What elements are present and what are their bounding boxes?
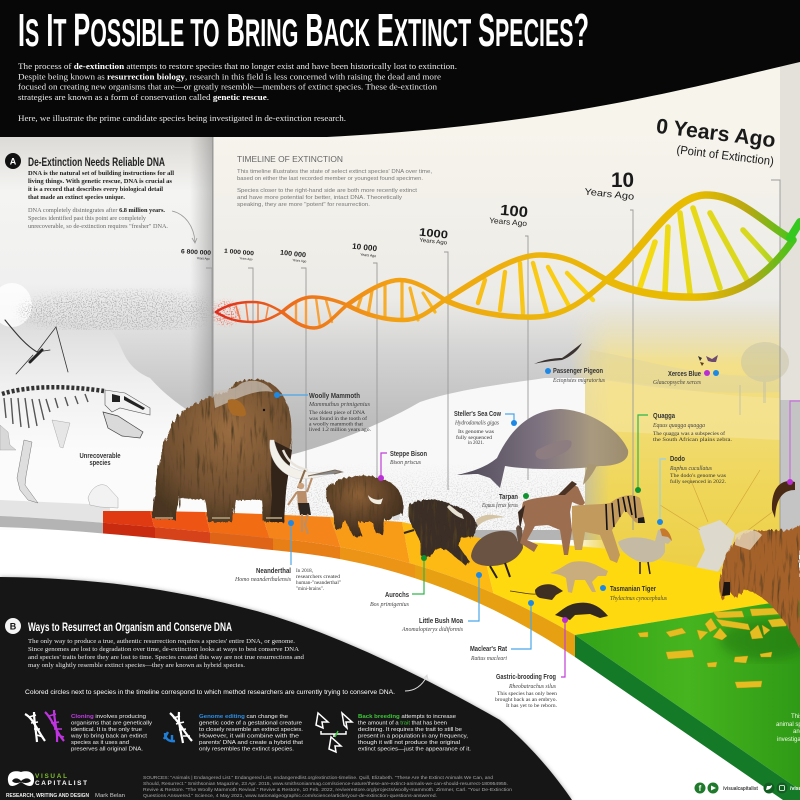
label: 100: 100 (499, 202, 529, 221)
label: 10: Years Ago (584, 186, 635, 202)
label: 10: 10 (611, 169, 634, 192)
animal: aurochs (404, 499, 505, 565)
paragraph A: living things. With genetic rescue, DNA is crucial as (28, 178, 172, 185)
label: 100 000: Years Ago (292, 258, 307, 263)
unrecoverable label: species (90, 460, 111, 467)
badge A (5, 153, 21, 169)
label: 0 Years Ago (653, 115, 778, 168)
intro paragraph: Despite being known as resurrection biology , research in this field is less concerned with raising the dead and more (18, 72, 441, 82)
animal: steppe bison (327, 476, 403, 537)
animal: tarpan (518, 481, 585, 555)
text: genome editing: However, it will combine with the (199, 734, 299, 740)
callout: woolly mammoth: a woolly mammoth that (309, 422, 364, 428)
gold fragments (638, 608, 787, 688)
animal: quagga (572, 495, 645, 563)
callout: aurochs: Bos primigenius (370, 602, 410, 608)
animal: gastric-brooding frog (555, 603, 608, 620)
callout: quagga: the South African plains zebra. (653, 438, 732, 443)
callout: xerces blue: Glaucopsyche xerces (653, 380, 702, 386)
paragraph B: may only slightly resemble extinct species—they are known as hybrid species. (28, 662, 245, 669)
callout: dodo (657, 456, 726, 525)
animal: large hybrid beast (720, 481, 800, 650)
text: back breeding: Back breeding attempts to increase (358, 714, 456, 720)
unrecoverable label (80, 453, 121, 467)
arrow: to timeline (405, 675, 428, 691)
animal: neanderthal (288, 470, 342, 534)
callout: steppe bison (378, 451, 427, 481)
text: back breeding: present in a population in any frequency, (358, 734, 468, 740)
timeline paragraph: Species closer to the right-hand side are both more recently extinct (237, 188, 418, 194)
callout: passenger pigeon: Passenger Pigeon (553, 368, 603, 375)
text: back breeding: declining. It requires the trait to still be (358, 727, 462, 733)
callout: steller's sea cow: Its genome was (458, 430, 494, 435)
callout: maclear's rat: Maclear's Rat (470, 646, 508, 653)
intro paragraph: Here, we illustrate the prime candidate species being investigated in de-extinction research. (18, 114, 346, 123)
DNA strands (216, 195, 800, 328)
animal: passenger pigeon (534, 343, 582, 364)
label: 6 800 000 (181, 248, 212, 261)
text: genome editing (199, 714, 303, 752)
timeline paragraph: speaking, they are more "potent" for resurrection. (237, 202, 370, 208)
credit name: Mark Belan (95, 793, 125, 799)
callout: quagga: The quagga was a subspecies of (653, 432, 725, 437)
animal: dodo (618, 528, 672, 574)
text: cloning: organisms that are genetically (71, 720, 152, 726)
text: genome editing: genetic code of a gestational creature (199, 720, 302, 726)
text: cloning: preserves all original DNA. (71, 746, 143, 752)
section A: De-Extinction Needs Reliable DNA (5, 153, 197, 243)
DNA dust left of the helix (0, 280, 242, 330)
heading A: De-Extinction Needs Reliable DNA (28, 155, 165, 169)
visual capitalist logo: VISUAL (35, 773, 67, 780)
text: cloning: identical. It is the only true (71, 727, 142, 733)
callout: steller's sea cow: in 2021. (468, 441, 484, 446)
bottom dark panel (0, 577, 572, 800)
label: 1 000 000: 1 000 000 (224, 248, 255, 257)
callout: gastric-brooding frog: Gastric-brooding Frog (496, 674, 556, 681)
label: 1000 (418, 227, 449, 247)
intro paragraph: The process of de-extinction attempts to restore species that no longer exist and have been historically lost to extinction. (18, 62, 457, 71)
callout: tarpan: Tarpan (499, 494, 518, 501)
paragraph B (28, 638, 305, 669)
sources: SOURCES: "Animals | Endangered List." Endangered List, endangeredlist.org/extinction-timeline. Quill, Elizabeth. "These Are the Extinct Animals We Can, and (143, 775, 493, 780)
text: genome editing: Genome editing can change the (199, 714, 288, 720)
callout: dodo: The dodo's genome was (670, 474, 726, 479)
DNA double helix (216, 195, 800, 328)
label: 0 Years Ago: (Point of Extinction) (676, 142, 775, 168)
intro paragraph (18, 62, 457, 123)
social icons (694, 782, 800, 794)
paragraph A2 (28, 207, 169, 230)
paragraph A2: DNA completely disintegrates after 6.8 million years. (28, 207, 166, 214)
timeline paragraph (237, 169, 432, 208)
triceratops skull (88, 485, 118, 508)
text: cloning: way to bring back an extinct (70, 734, 147, 740)
paragraph B: Since genomes are lost to degradation over time, de-extinction looks at ways to best conserve DNA (28, 646, 299, 653)
label: 6 800 000: Years Ago (197, 256, 210, 261)
yellow wall zone (570, 300, 780, 620)
unrecoverable species fossils (0, 320, 150, 508)
intro paragraph: strategies are known as a form of conservation called genetic rescue . (18, 93, 269, 102)
callout: passenger pigeon: Ectopistes migratorius (552, 378, 606, 384)
callout: woolly mammoth (274, 392, 371, 433)
callout: woolly mammoth: Mammuthus primigenius (308, 402, 371, 408)
text: genome editing: to closely resemble an extinct species. (199, 727, 303, 733)
paragraph A: DNA is the natural set of building instructions for all (28, 170, 174, 177)
crack splash (660, 470, 775, 600)
label: 10 000: 10 000 (352, 242, 378, 253)
callout: steppe bison: Steppe Bison (390, 451, 427, 458)
paragraph A: that made an extinct species unique. (28, 194, 125, 201)
label: 6 800 000: 6 800 000 (181, 248, 212, 257)
callout: right-edge species leader (787, 401, 800, 485)
animal: maclear's rat (510, 584, 563, 600)
animal: little bush moa (471, 525, 523, 578)
callout: gastric-brooding frog: This species has only been (497, 692, 558, 697)
callout: gastric-brooding frog: brought back as an embryo. (495, 698, 557, 703)
animal: steller's sea cow (457, 409, 628, 488)
t-rex skeleton (0, 387, 150, 503)
green ground (575, 596, 800, 790)
ground front faces (0, 516, 575, 657)
title: IS IT POSSIBLE TO BRING BACK EXTINCT SPECIES? (18, 4, 589, 56)
badge B (5, 618, 21, 634)
callout: gastric-brooding frog: It has yet to be reborn. (506, 704, 557, 709)
badge B: B (10, 622, 17, 632)
callout: aurochs: Aurochs (385, 592, 409, 599)
callout: maclear's rat (470, 600, 534, 662)
callout: tarpan (481, 493, 529, 509)
callout: tarpan: Equus ferus ferus (481, 502, 519, 509)
callout: neanderthal: Neanderthal (256, 568, 291, 575)
callout: dodo: fully sequenced in 2022. (670, 480, 726, 485)
paragraph B: and species' traits before they are lost to time. Species created this way are not true resurrections and (28, 654, 305, 661)
cropped green caption: investiga (777, 737, 800, 743)
timeline paragraph: based on either the last recorded member or youngest found specimen. (237, 176, 423, 182)
label: 10 000: Years Ago (360, 253, 376, 258)
callout: aurochs (370, 555, 427, 608)
callout: tasmanian tiger (600, 585, 668, 602)
callout: neanderthal: "mini-brains". (296, 587, 324, 592)
timeline of extinction text (237, 154, 432, 208)
animal: woolly mammoth (152, 379, 341, 522)
species callouts (234, 368, 800, 743)
timeline year labels (181, 115, 778, 263)
timeline paragraph: This timeline illustrates the state of select extinct species' DNA over time, (237, 169, 432, 175)
note: colored circles: Colored circles next to species in the timeline correspond to which method researchers are currently trying to conserve DNA. (25, 689, 395, 696)
timeline paragraph: and have more potential for better, intact DNA. Theoretically (237, 195, 402, 201)
callout: steller's sea cow: Steller's Sea Cow (454, 411, 501, 418)
callout: neanderthal: In 2018, (296, 569, 313, 574)
social icons: /visualcapitalist (723, 786, 758, 792)
DNA rungs (236, 208, 773, 327)
sources: Questions Answered." Science, 4 May 2021, www.nationalgeographic.com/science/article/your-de-extinction-questions-answered. (143, 793, 437, 798)
icon: cloning DNA (25, 710, 64, 742)
paragraph A2: Species identified past this point are completely (28, 215, 146, 222)
callout: steller's sea cow: Hydrodamalis gigas (454, 420, 500, 426)
callout: dodo: Dodo (670, 456, 685, 463)
callout: woolly mammoth: was found in the tooth of (309, 417, 367, 422)
callout: gastric-brooding frog (495, 617, 568, 709)
label: 1000: Years Ago (419, 238, 447, 247)
callout: little bush moa (401, 572, 482, 633)
label: 1000: 1000 (418, 227, 449, 242)
callout: passenger pigeon (545, 368, 606, 384)
intro paragraph: focused on creating new organisms that are—or greatly resemble—members of extinct species. These de-extinction (18, 82, 438, 92)
label: 1 000 000 (223, 248, 255, 261)
text: genome editing: parents' DNA and create a hybrid that (199, 740, 303, 746)
icon: back breeding (316, 713, 352, 752)
footer (6, 771, 800, 799)
callout: woolly mammoth: Woolly Mammoth (309, 393, 360, 400)
label: 100: Years Ago (489, 216, 528, 228)
callout: neanderthal: researchers created (296, 575, 341, 580)
social icons: f (699, 784, 702, 793)
text: cloning: Cloning involves producing (71, 714, 146, 720)
visual capitalist logo: CAPITALIST (35, 780, 87, 787)
label: 10 000 (351, 242, 378, 258)
arrow: to 6 800 000 (172, 211, 197, 243)
animal: xerces blue butterflies (698, 355, 718, 366)
label: 10 (584, 169, 635, 202)
cropped green caption (776, 714, 800, 743)
sources: Revive & Restore. "The Woolly Mammoth Revival." Revive & Restore, 10 Feb. 2022, reviverestore.org/projects/woolly-mammoth. Zimmer, Carl. "Your De-Extinction (143, 787, 512, 792)
sources (143, 775, 512, 798)
heading B: Ways to Resurrect an Organism and Conserve DNA (28, 620, 232, 634)
callout: quagga: Quagga (653, 413, 675, 420)
callout: little bush moa: Little Bush Moa (419, 618, 463, 625)
callout: little bush moa: Anomalopteryx didiformis (401, 626, 464, 633)
species animals (152, 343, 800, 650)
label: 100 000: 100 000 (280, 250, 306, 259)
callout: maclear's rat: Rattus macleari (470, 656, 507, 662)
unrecoverable label: Unrecoverable (80, 453, 121, 460)
callout: steppe bison: Bison priscus (390, 460, 422, 466)
callout: steller's sea cow: fully sequenced (456, 436, 493, 441)
heading: timeline: TIMELINE OF EXTINCTION (237, 154, 343, 164)
section B: ways to resurrect (5, 618, 471, 752)
timeline marker lines (206, 180, 780, 535)
text: cloning (70, 714, 152, 752)
paragraph A (28, 170, 174, 201)
platform ground (0, 500, 800, 800)
callout: woolly mammoth: lived 1.2 million years ago. (309, 428, 371, 433)
callout: quagga (635, 413, 732, 493)
text: back breeding: though it will not produce the original (358, 740, 460, 746)
paragraph A: it is a record that describes every biological detail (28, 186, 163, 193)
callout: steller's sea cow (454, 411, 517, 446)
distant trees (739, 342, 789, 415)
label: 100 000 (279, 250, 307, 263)
pterosaur skeleton (5, 320, 68, 374)
label: 0 Years Ago: 0 Years Ago (655, 115, 777, 152)
ground top surface (0, 500, 790, 640)
credits: RESEARCH, WRITING AND DESIGN (6, 793, 89, 799)
visual capitalist logo (8, 771, 87, 787)
top black header (0, 0, 800, 137)
badge A: A (10, 156, 17, 166)
text: genome editing: only resembles the extinct species. (199, 746, 294, 752)
animal: tasmanian tiger (550, 561, 608, 593)
callout: tasmanian tiger: Thylacinus cynocephalus (610, 596, 668, 602)
label: 1 000 000: Years Ago (239, 256, 253, 261)
callout: xerces blue (653, 370, 719, 386)
callout: neanderthal: Homo neanderthalensis (234, 577, 292, 583)
snowy hills backdrop (0, 340, 789, 572)
text: cloning: species as it uses and (71, 740, 129, 746)
sources: Should, Resurrect." Smithsonian Magazine, 23 Apr. 2015, www.smithsonianmag.com/science-nature/these-are-extinct-animals-we-can-should-resurrect-180954955. (143, 781, 508, 786)
callout: neanderthal: human-"neanderthal" (296, 581, 341, 586)
callout: xerces blue: Xerces Blue (668, 371, 701, 378)
text: back breeding: extinct species—just the appearance of it. (358, 746, 471, 752)
callout: gastric-brooding frog: Rheobatrachus silus (508, 684, 557, 690)
wall background (0, 50, 800, 620)
callout: neanderthal (234, 520, 341, 592)
text: back breeding (358, 714, 471, 752)
callout: woolly mammoth: The oldest piece of DNA (309, 411, 365, 416)
paragraph A2: unrecoverable, so de-extinction requires "fresher" DNA. (28, 223, 169, 230)
label: 100 (489, 201, 529, 228)
callout: quagga: Equus quagga quagga (652, 423, 705, 429)
callout: dodo: Raphus cucullatus (669, 466, 713, 472)
text: back breeding: the amount of a trait that has been (358, 720, 447, 726)
callout: tasmanian tiger: Tasmanian Tiger (610, 586, 656, 593)
paragraph B: The only way to produce a true, authentic resurrection requires a species' entire DNA, or genome. (28, 638, 295, 645)
icon: genome editing DNA (164, 712, 192, 743)
